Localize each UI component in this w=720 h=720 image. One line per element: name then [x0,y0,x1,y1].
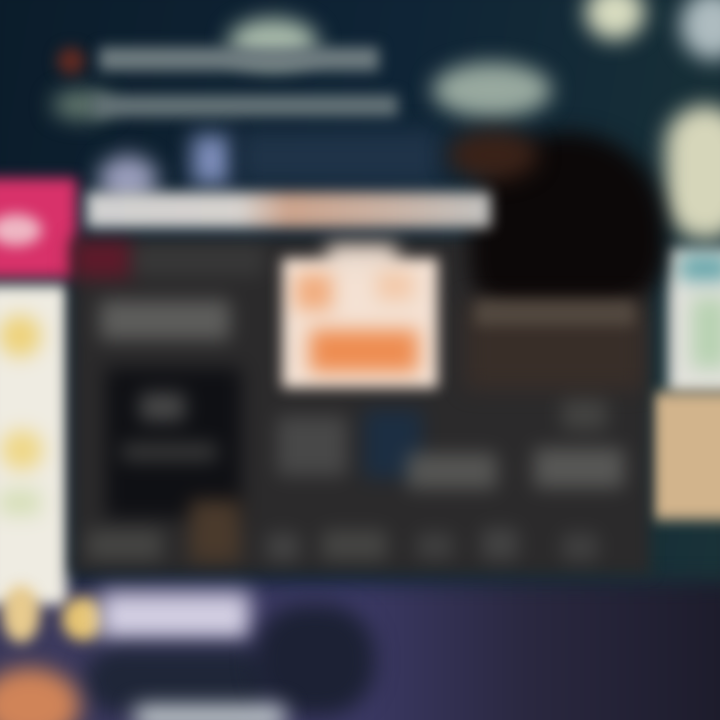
bottom item seven [562,533,598,561]
middle stat block [277,416,347,476]
cloud: top right [585,0,645,40]
card accent left [296,274,332,310]
corner accent: orange [0,668,80,720]
bar: headline banner [86,192,491,228]
panel: left pink header [0,178,77,278]
header strip [134,244,264,276]
panel: right cream [652,392,720,520]
list accent [0,490,40,515]
figure: neck text [475,300,635,326]
cloud: right side [665,105,720,240]
icon: emoji one [0,315,41,357]
bottom white strip [135,705,285,720]
card roof [327,244,397,269]
header tab [72,240,132,278]
bottom item six [482,528,518,560]
icon: emoji two [1,430,43,470]
figure: person head [470,132,665,307]
decorative tree [192,135,230,185]
bottom item two [190,500,240,562]
cloud: corner right [680,0,720,60]
title [50,38,406,126]
bottom item three [267,533,299,561]
bottom item four [322,530,387,560]
icon: left panel badge [0,214,42,246]
card: highlighted centre [282,258,438,388]
panel: left list [0,285,67,605]
right hand emoji [62,597,104,641]
icon: title marker [57,47,85,75]
left text block [100,300,230,340]
title line two [93,95,398,117]
cloud: middle right [432,62,552,118]
left column item two [122,443,217,461]
right stat one [407,453,497,489]
bottom item one [87,530,162,560]
card figure [310,330,418,372]
figure: sleeve [255,605,375,715]
middle blue block [364,410,422,478]
building strip [240,130,440,185]
left hand emoji [2,585,40,643]
cloud: top centre [228,18,318,66]
figure: hair edge [448,130,538,180]
screen accent [680,256,720,280]
card accent right [377,272,413,300]
panel: right app screen [668,248,720,393]
background: floor [0,582,720,720]
figure: arm dark [85,648,275,713]
title line one [99,47,379,71]
figure: neck [465,300,645,390]
decorative bush [98,155,158,203]
bottom item five [417,533,453,559]
cloud: left [52,90,112,120]
panel: lower lavender [100,592,250,640]
right item [562,398,607,430]
panel: main dark screen [72,238,650,574]
right stat two [534,448,624,488]
left column item [140,393,185,421]
left column dark [106,368,241,518]
screen chart [692,298,720,368]
